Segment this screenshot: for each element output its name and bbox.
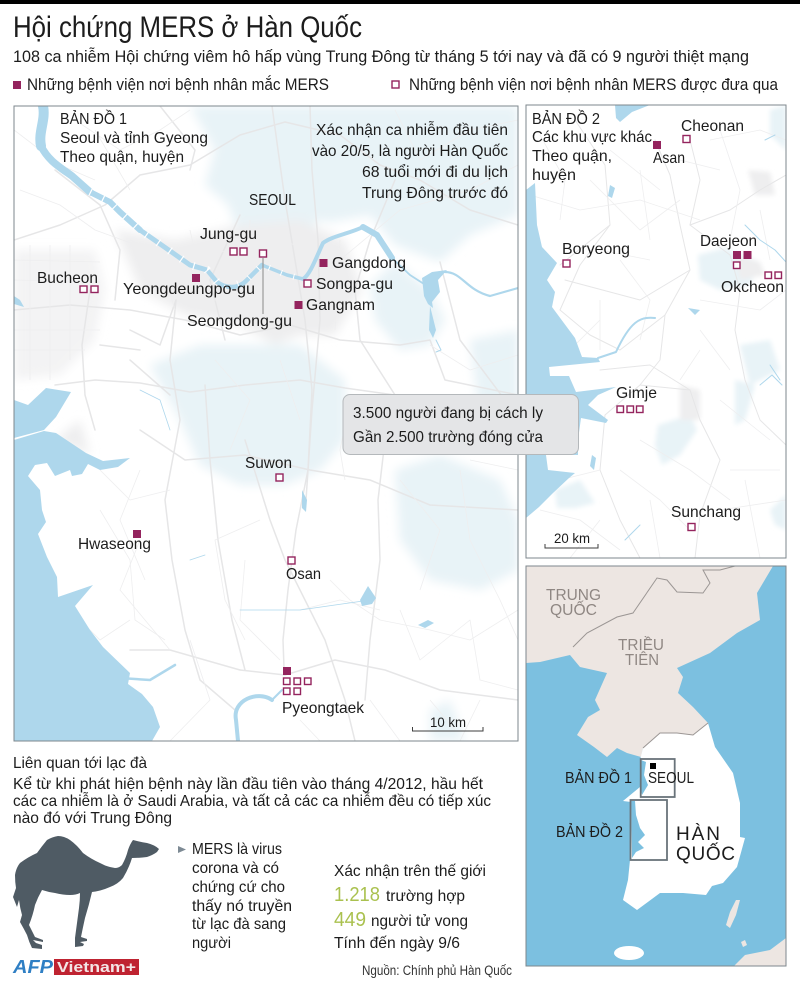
scale bar 10 km: 10 km [430,714,466,730]
text block: worldwide confirmed figures: Xác nhận trên thế giới [334,863,486,880]
marker group: Jung-gu: Jung-gu [200,226,257,243]
callout: quarantine and school closures: Gần 2.500 trường đóng cửa [353,429,543,446]
first case note: Xác nhận ca nhiễm đầu tiên [316,120,508,139]
map 2 heading: BẢN ĐỒ 2 [532,109,600,128]
marker group: Asan [653,141,685,167]
text block: worldwide confirmed figures: Tính đến ngày 9/6 [334,935,460,952]
marker group: Sunchang: Sunchang [671,504,741,521]
text block: virus origin: từ lạc đà sang [192,916,286,933]
text block: worldwide confirmed figures: 449 [334,909,366,931]
first case note: Trung Đông trước đó [362,185,508,202]
marker group: Asan: Asan [653,150,685,167]
text block: virus origin: chứng cứ cho [192,879,285,896]
map 2 heading [532,109,652,184]
legend: hollow marker [392,81,399,88]
land: South Korea [623,723,745,910]
country label: China: TRUNG [546,587,601,604]
panel: locator map of Korea [526,566,786,966]
text block: camel link: Kể từ khi phát hiện bệnh này lần đầu tiên vào tháng 4/2012, hầu hết [13,775,484,793]
first case note: 68 tuổi mới đi du lịch [362,163,508,181]
marker group: Sunchang [671,504,741,530]
label: Seoul: SEOUL [249,192,296,209]
marker group: Cheonan: Cheonan [681,118,744,135]
legend: filled label: Những bệnh viện nơi bệnh nhân mắc MERS [27,75,329,94]
west sea [14,296,434,741]
country label: South Korea [676,824,735,865]
marker group: Boryeong [562,241,630,267]
source: Nguồn: Chính phủ Hàn Quốc [362,963,512,978]
marker group: Daejeon [700,233,757,268]
map 2 heading: huyện [532,167,576,184]
text block: camel link: nào đó với Trung Đông [13,810,172,827]
road network [530,120,786,558]
map 1 heading: Theo quận, huyện [60,149,184,166]
text block: camel link: Liên quan tới lạc đà [13,755,147,772]
map 1 heading [60,109,208,166]
country label: North Korea: TRIỀU [618,635,664,654]
locator box: map 2 [556,800,667,860]
country label: China: QUỐC [550,599,597,619]
country label: South Korea: HÀN [676,824,720,845]
text block: worldwide confirmed figures: người tử vong [371,913,468,930]
panel: map 1 Seoul and Gyeonggi [14,106,518,741]
scale bar 20 km [545,530,598,548]
map 2 heading: Theo quận, [532,148,612,165]
locator box: map 1 [565,759,694,797]
scale bar 10 km [412,714,483,731]
marker group: Seongdong-gu [187,250,292,330]
text block: worldwide confirmed figures: trường hợp [386,888,465,905]
logo: AFP Vietnam+: AFP [12,957,54,977]
legend [13,75,778,94]
land: Japan [734,938,786,966]
text block: worldwide confirmed figures: 1.218 [334,884,380,906]
country label: China [546,587,601,619]
country label: North Korea [618,635,664,669]
country label: North Korea: TIÊN [625,650,659,669]
marker group: Yeongdeungpo-gu: Yeongdeungpo-gu [123,281,255,298]
marker group: Gimje: Gimje [616,385,657,402]
land: China and North Korea [526,566,773,757]
text block: virus origin [178,841,292,952]
scale bar 20 km: 20 km [554,530,590,546]
marker group: Osan: Osan [286,566,321,583]
logo: AFP Vietnam+: Vietnam+ [57,959,136,976]
top bar [0,0,800,4]
icon: bullet triangle [178,846,186,853]
road network [14,106,518,741]
sea and rivers [526,105,786,540]
marker group: Osan [286,557,321,583]
country label: South Korea: QUỐC [676,843,735,865]
marker group: Gimje [616,385,657,412]
locator box: map 1: BẢN ĐỒ 1 [565,768,632,787]
callout: quarantine and school closures [343,394,578,454]
map 1 heading: Seoul và tỉnh Gyeong [60,130,208,147]
text block: virus origin: người [192,935,231,952]
marker group: Seongdong-gu: Seongdong-gu [187,313,292,330]
text block: virus origin: corona và có [192,860,279,877]
marker group: Bucheon: Bucheon [37,270,98,287]
marker group: Yeongdeungpo-gu [123,274,255,298]
marker group: Gangdong: Gangdong [332,255,406,272]
icon: camel silhouette [13,836,159,949]
title: Hội chứng MERS ở Hàn Quốc [13,11,362,44]
logo: AFP Vietnam+ [12,957,139,977]
locator box: map 2: BẢN ĐỒ 2 [556,822,623,841]
text block: camel link [13,755,491,827]
han river [40,106,518,352]
subtitle: 108 ca nhiễm Hội chứng viêm hô hấp vùng Trung Đông từ tháng 5 tới nay và đã có 9 người thiệt mạng [13,47,749,66]
text block: camel link: các ca nhiễm là ở Saudi Arabia, và tất cả các ca nhiễm đều có tiếp xúc [13,791,491,810]
map 2 heading: Các khu vực khác [532,129,652,146]
island: Jeju [614,946,644,960]
legend: filled marker [13,81,21,89]
marker group: Cheonan [681,118,744,142]
marker group: Pyeongtaek: Pyeongtaek [282,700,365,717]
text block: virus origin: MERS là virus [192,841,282,858]
map 1 heading: BẢN ĐỒ 1 [60,109,127,128]
marker group: Jung-gu [200,226,257,255]
marker group: Suwon [245,455,292,481]
marker group: Daejeon: Daejeon [700,233,757,250]
locator box: map 1: SEOUL [648,770,694,787]
panel: map 2 other regions [526,105,786,558]
marker group: Suwon: Suwon [245,455,292,472]
national borders [573,566,735,647]
marker group: Pyeongtaek [282,667,365,717]
coast detail [631,760,648,858]
marker group: Boryeong: Boryeong [562,241,630,258]
text block: virus origin: thấy nó truyền [192,898,292,915]
marker group: Songpa-gu: Songpa-gu [316,276,393,293]
marker group: Okcheon: Okcheon [721,279,784,296]
text block: worldwide confirmed figures [334,863,486,952]
first case note: vào 20/5, là người Hàn Quốc [312,143,508,160]
marker group: Hwaseong: Hwaseong [78,536,151,553]
marker group: Gangnam: Gangnam [306,297,375,314]
first case note [312,120,508,202]
island: Tsushima [726,900,740,928]
callout: quarantine and school closures: 3.500 người đang bị cách ly [353,405,543,422]
